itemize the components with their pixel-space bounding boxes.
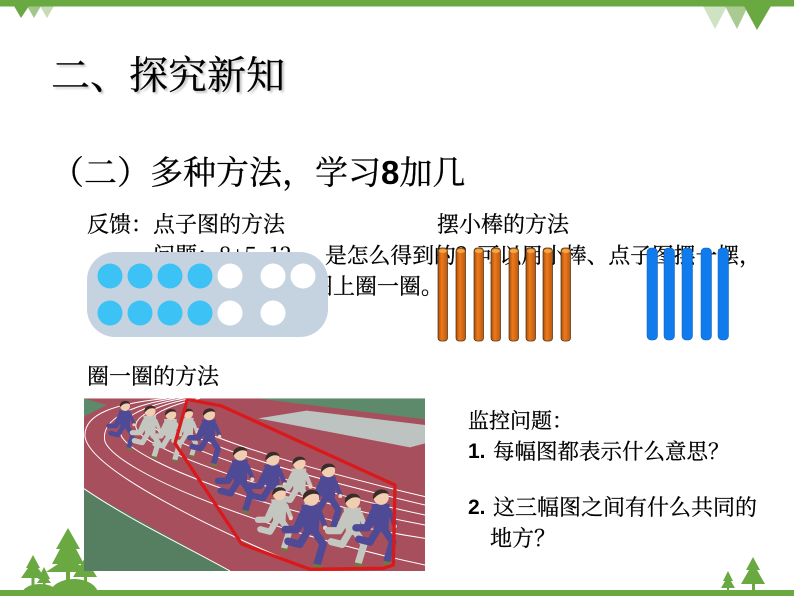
title: 二、探究新知 (51, 45, 285, 101)
decoration: top green bar with triangles (0, 0, 794, 30)
question text behind diagrams, line 1: 问题：8+5=13 (153, 239, 292, 270)
question 1 number: 1. (468, 440, 486, 463)
question 2: 这三幅图之间有什么共同的 (493, 491, 757, 522)
question 2 number: 2. (468, 496, 486, 519)
label: circling method: 圈一圈的方法 (87, 360, 219, 391)
running track illustration (84, 398, 425, 571)
question 2 second line: 地方？ (490, 522, 556, 553)
blue sticks (647, 248, 728, 340)
question 1: 每幅图都表示什么意思？ (493, 435, 730, 466)
question text line 2: 图上圈一圈。 (311, 270, 443, 301)
label: dot diagram method: 反馈：点子图的方法 (87, 208, 285, 239)
orange sticks (438, 248, 729, 342)
question text line 1 continued: 是怎么得到的？可以用小棒、点子图摆一摆， (325, 239, 761, 270)
label: sticks method: 摆小棒的方法 (437, 208, 569, 239)
heading: monitoring questions: 监控问题： (468, 405, 573, 435)
section heading: （二）多种方法，学习8加几 (51, 147, 465, 194)
dot panel (87, 252, 328, 337)
